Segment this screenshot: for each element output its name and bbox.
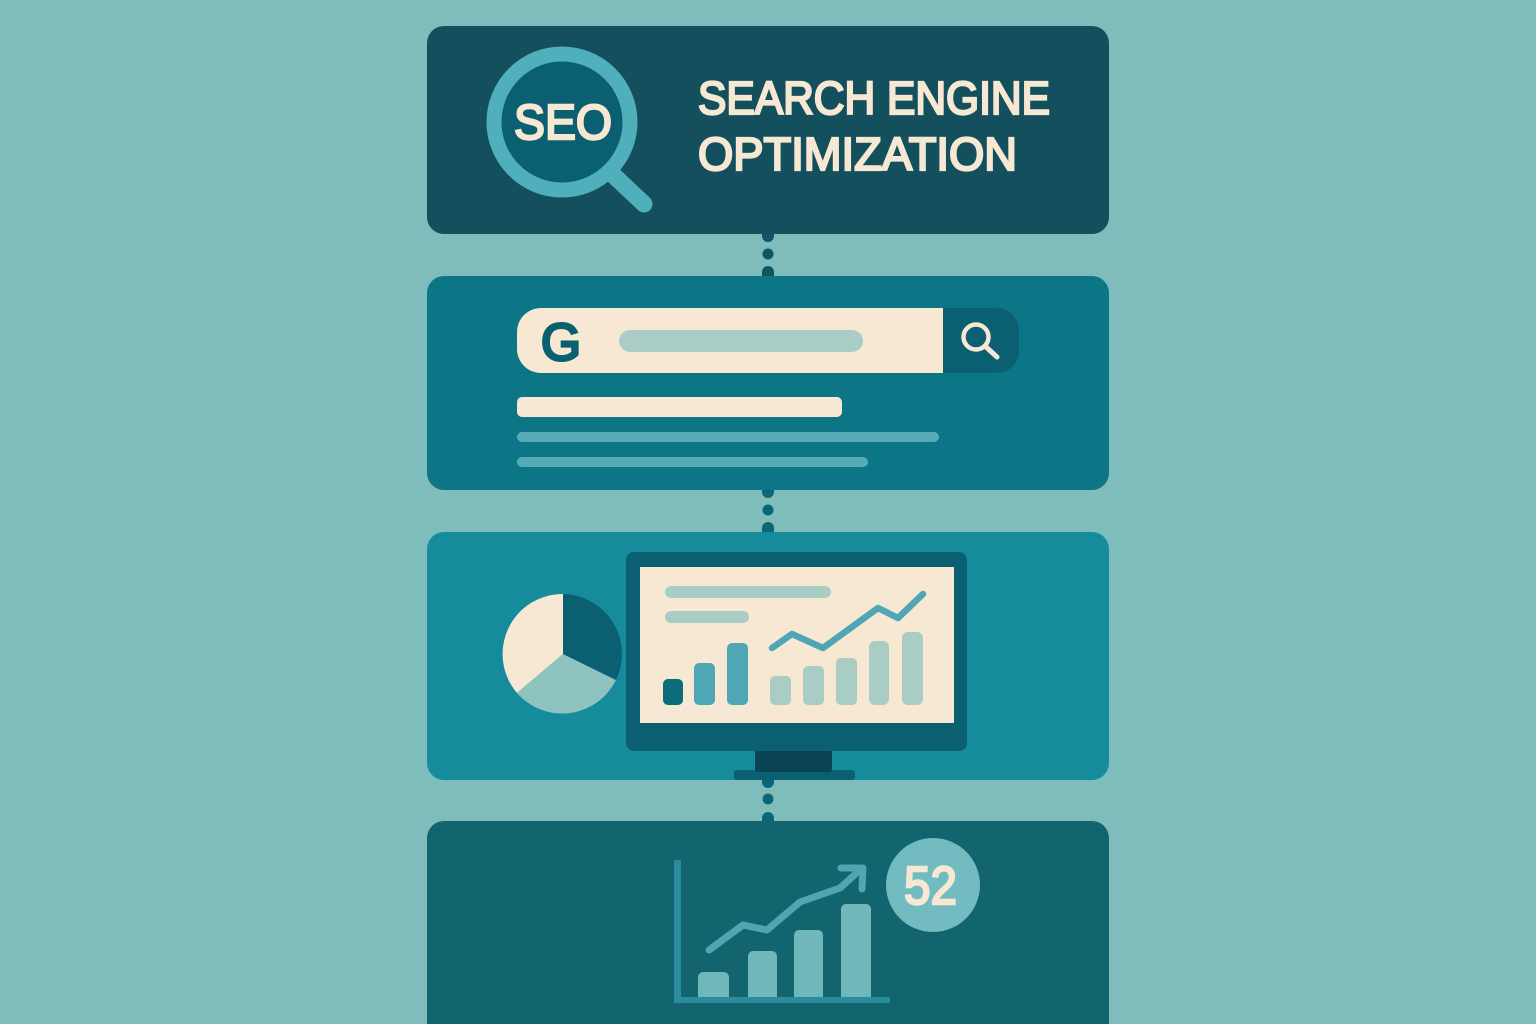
growth arrow bbox=[709, 868, 863, 950]
icon: SEO magnifying glass bbox=[494, 54, 644, 204]
result title bbox=[517, 397, 842, 417]
dark bars bbox=[663, 643, 748, 705]
Google G: G bbox=[541, 314, 581, 372]
result lines bbox=[517, 432, 939, 467]
icon: pie chart bbox=[503, 594, 622, 714]
search input bbox=[517, 308, 943, 373]
chart axes bbox=[674, 860, 890, 1003]
icon: search magnifier bbox=[964, 324, 997, 357]
trend line bbox=[772, 594, 923, 648]
title: SEARCH ENGINE bbox=[698, 72, 1050, 124]
monitor bbox=[626, 552, 967, 751]
score badge bbox=[886, 838, 980, 932]
monitor stand bbox=[734, 770, 855, 780]
score badge: 52 bbox=[904, 856, 957, 916]
panel: header bbox=[427, 26, 1109, 234]
SEO label: SEO bbox=[514, 96, 612, 150]
growth bars bbox=[698, 904, 871, 997]
panel: growth bbox=[427, 821, 1109, 1024]
search button bbox=[930, 308, 1019, 373]
query placeholder bbox=[619, 330, 863, 352]
screen text lines bbox=[665, 586, 831, 623]
light bars bbox=[770, 632, 923, 705]
connector: search to analytics bbox=[762, 490, 774, 532]
connector: header to search bbox=[762, 234, 774, 276]
connector: analytics to growth bbox=[762, 780, 774, 822]
panel: search results bbox=[427, 276, 1109, 490]
title: OPTIMIZATION bbox=[698, 128, 1017, 180]
panel: analytics bbox=[427, 532, 1109, 780]
title bbox=[698, 72, 1050, 180]
